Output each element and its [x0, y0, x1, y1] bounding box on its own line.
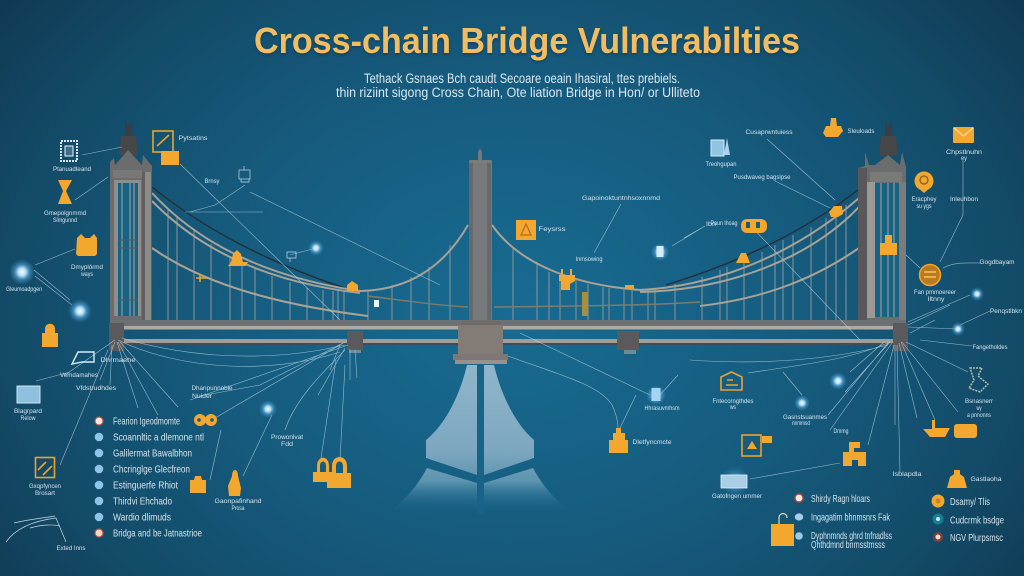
group: upper left labels and icons — [6, 131, 324, 347]
legend list far right: Dsamy/ Tlis — [950, 496, 990, 508]
icon: document glow — [711, 138, 730, 156]
icon: box — [76, 234, 97, 256]
label: blue chip box: Gatofngen ummer — [712, 493, 763, 500]
label: hourglass — [44, 210, 86, 224]
legend list left: Bridga and be Jatnastrioe — [113, 528, 202, 540]
label: right edge: Gogdbayam — [980, 259, 1014, 266]
label: gold circle — [914, 289, 957, 303]
label: gold circle: Iltnny — [928, 296, 945, 303]
label: right glow: Penqstlbkn — [990, 308, 1022, 315]
icon: head pin — [914, 172, 934, 193]
icon: gold circle — [920, 264, 940, 286]
label: gear square: Feysrss — [538, 226, 566, 233]
icon: glow right two — [951, 322, 965, 336]
legend list center right — [795, 493, 892, 551]
icon: sketch cluster — [969, 368, 988, 392]
legend list center right: Qhthdmnd bnrnsstmsss — [811, 539, 885, 551]
legend list left: Fearion Igeodmomte — [113, 416, 180, 428]
label: glow lock — [271, 434, 303, 448]
label: orange cluster: Sleuloads — [848, 128, 875, 135]
label: upper center left: Dhanpunnoble — [192, 385, 233, 392]
label: head pin: su ygs — [916, 203, 932, 210]
legend list left: Estinguerfe Rhiot — [113, 480, 178, 492]
label: glow lock: Fdd — [281, 441, 293, 448]
icon: orange machine — [954, 424, 977, 438]
icon: center left marker — [347, 281, 358, 291]
label: envelope: Chpstlnuhn — [946, 149, 982, 156]
label: device top: Dhrmaehe — [100, 357, 136, 364]
icon: right cable marker — [736, 253, 750, 263]
icon: center right box — [559, 269, 575, 290]
icon: glow doc — [646, 385, 666, 405]
label: sketch cluster: wy — [976, 405, 982, 412]
icon: orange capsule — [741, 219, 767, 233]
label: dmmg: Dmmg — [834, 428, 849, 435]
label: hourglass: Gmepolgnmmd — [44, 210, 86, 217]
right tower — [858, 115, 906, 322]
label: sketch cluster — [965, 398, 994, 419]
icon: right cable tag — [625, 285, 634, 289]
group: upper right labels and icons — [706, 118, 1022, 336]
label: upper center left: Nuider — [192, 393, 213, 400]
icon: glow right lower two — [794, 395, 810, 411]
suspension bridge — [109, 115, 908, 514]
label: orange tent: Gastlaoha — [970, 476, 1002, 483]
central tower — [469, 148, 492, 321]
label: chip: Ptanuadteand — [53, 166, 91, 173]
label: head pin: Eracphey — [912, 196, 937, 203]
icon: cable marker left — [228, 250, 248, 266]
icon: glow tablet — [651, 243, 669, 261]
legend list far right: Cudcrmk bsdge — [950, 514, 1004, 526]
icon: glowing device — [72, 352, 94, 364]
group: center labels and icons — [516, 195, 716, 453]
icon: orange gear square — [516, 220, 536, 240]
legend list center right: Ingagatim bhnmsnrs Fak — [811, 512, 891, 524]
legend list left: Wardio dlimuds — [113, 512, 171, 524]
legend list left: Scoannltic a dlemone ntl — [113, 432, 204, 444]
label: envelope — [946, 149, 982, 162]
label: house: Fntecorngthdes — [712, 398, 754, 405]
icon: orange frame — [742, 435, 772, 456]
label: small right: Ibn — [706, 221, 716, 228]
subtitle — [336, 71, 700, 100]
icon: chain link — [194, 414, 217, 426]
icon: lock left — [42, 324, 58, 347]
label: striped square: Gxqpfyncen — [29, 483, 61, 490]
icon: orange tent — [947, 470, 967, 488]
label: glow lower: Gasnstsuanmes — [783, 414, 828, 421]
label: figure: Prosa — [232, 505, 245, 512]
title: Cross-chain Bridge Vulnerabilties — [254, 20, 800, 61]
label: striped square: Brosart — [35, 490, 55, 497]
label: glow lower: nnmmsd — [792, 420, 810, 427]
label: blue square — [14, 408, 42, 422]
water reflection below central pier — [392, 365, 569, 510]
group: lower left labels and icons — [6, 352, 351, 552]
connector lines — [34, 139, 990, 480]
icon: glow right lower one — [829, 372, 847, 390]
legend list far right: NGV Plurpsmsc — [950, 532, 1003, 544]
legend list far right — [932, 494, 1004, 544]
legend list center right: Shirdy Ragn hloars — [811, 493, 870, 505]
icon: sketch node — [287, 252, 296, 262]
icon: hourglass — [58, 180, 72, 204]
label: pan hoag: Paun Ihoag — [710, 220, 738, 227]
label: glow doc: Hhrasuvmhsm — [644, 405, 680, 412]
icon: blue square — [17, 386, 40, 403]
legend list left: Galilermat Bawalbhon — [113, 448, 192, 460]
label: small device: Brnsy — [204, 178, 220, 185]
icon: glow globe — [68, 299, 92, 323]
icon: glow shield — [9, 259, 35, 285]
label: blue square: Blagrpard — [14, 408, 42, 415]
label: head pin — [912, 196, 937, 210]
label: glow lock: Prowonlvat — [271, 434, 303, 441]
icon: orange strut — [582, 292, 588, 316]
icon: chip — [61, 141, 77, 161]
label: box: ways — [80, 271, 94, 278]
label: sketch cluster: Bsnasnerr — [965, 398, 994, 405]
label: sketch cluster: a pnnonns — [967, 412, 992, 419]
icon: orange base — [609, 428, 628, 453]
group: lower right labels and icons — [712, 344, 1008, 551]
label: blue square: Relow — [20, 415, 36, 422]
label: center right top: Gapoinoktuntnhsoxnnmd — [582, 195, 660, 202]
label: figure: Gaonpafinhand — [214, 498, 262, 505]
icon: striped square — [36, 458, 54, 478]
icon: double locks — [313, 457, 351, 488]
icon: glow lock — [259, 400, 277, 418]
subtitle: thin riziint sigong Cross Chain, Ote liation Bridge in Hon/ or Ulliteto — [336, 85, 700, 100]
label: striped square — [29, 483, 61, 497]
icon: tower lock right — [880, 235, 897, 255]
legend list center right: Dyphnmnds ghrd tnfnadlss — [811, 530, 892, 542]
legend list left: Chcringlge Glecfreon — [113, 464, 190, 476]
label: box: Dmyplórmd — [71, 264, 103, 271]
label: device mid: Vemdamahes — [60, 372, 99, 379]
icon: glow right one — [970, 287, 984, 301]
legend list left — [95, 416, 204, 540]
icon: orange boat — [923, 420, 950, 437]
label: gold circle: Fan pmmoereer — [914, 289, 957, 296]
label: far right: Fangetholdes — [972, 344, 1008, 351]
icon: outlined square and box — [153, 131, 179, 165]
label: isblapdla: Isblapdla — [892, 471, 922, 478]
central pier — [453, 321, 508, 514]
label: box — [71, 264, 103, 278]
label: password bags: Pusdwaveg bagslpse — [734, 174, 791, 181]
legend list left: Thirdvi Ehchado — [113, 496, 172, 508]
subtitle: Tethack Gsnaes Bch caudt Secoare oeain Ihasiral, ttes prebiels. — [364, 71, 680, 86]
icon: house — [721, 372, 742, 390]
left tower — [110, 115, 152, 320]
icon: envelope — [953, 127, 974, 143]
label: hourglass: Slmgunnd — [53, 217, 77, 224]
label: right mid: Inleuhbon — [950, 196, 978, 203]
icon: orange cluster — [823, 118, 843, 137]
label: upper center left — [192, 385, 233, 400]
label: house: ws — [729, 404, 737, 411]
icon: chest — [190, 476, 206, 493]
label: outlined square: Pytsatins — [178, 135, 208, 142]
icon: figure — [228, 470, 241, 496]
icon: small device — [239, 166, 250, 182]
label: figure — [214, 498, 262, 512]
label: sketch bridge: Exted Inns — [56, 545, 86, 552]
icon: white tag — [374, 300, 379, 307]
label: house — [712, 398, 754, 411]
icon: blue chip box — [720, 466, 750, 496]
icon: glow node — [308, 240, 324, 256]
icon: gold junction — [829, 206, 843, 217]
label: device low: Vfdstrudhdes — [76, 385, 117, 392]
label: envelope: ey — [961, 155, 968, 162]
label: center right lower: Inmsowing — [576, 256, 603, 263]
label: document glow: Treohgupan — [706, 161, 737, 168]
label: glow shield: Gleumoadpgen — [6, 286, 42, 293]
label: top right: Cusaprwntuiess — [746, 129, 793, 136]
label: glow lower — [783, 414, 828, 427]
icon: lower lock — [771, 514, 794, 546]
cables and hangers — [152, 187, 859, 320]
icons on bridge — [196, 206, 897, 316]
truss supports — [109, 323, 908, 354]
roadway deck — [110, 320, 906, 345]
label: orange base: Dletfyncmcte — [632, 439, 672, 446]
icon: orange factory — [843, 442, 866, 466]
icon: cable link left — [196, 274, 208, 282]
icon: sketch bridge — [6, 516, 66, 542]
